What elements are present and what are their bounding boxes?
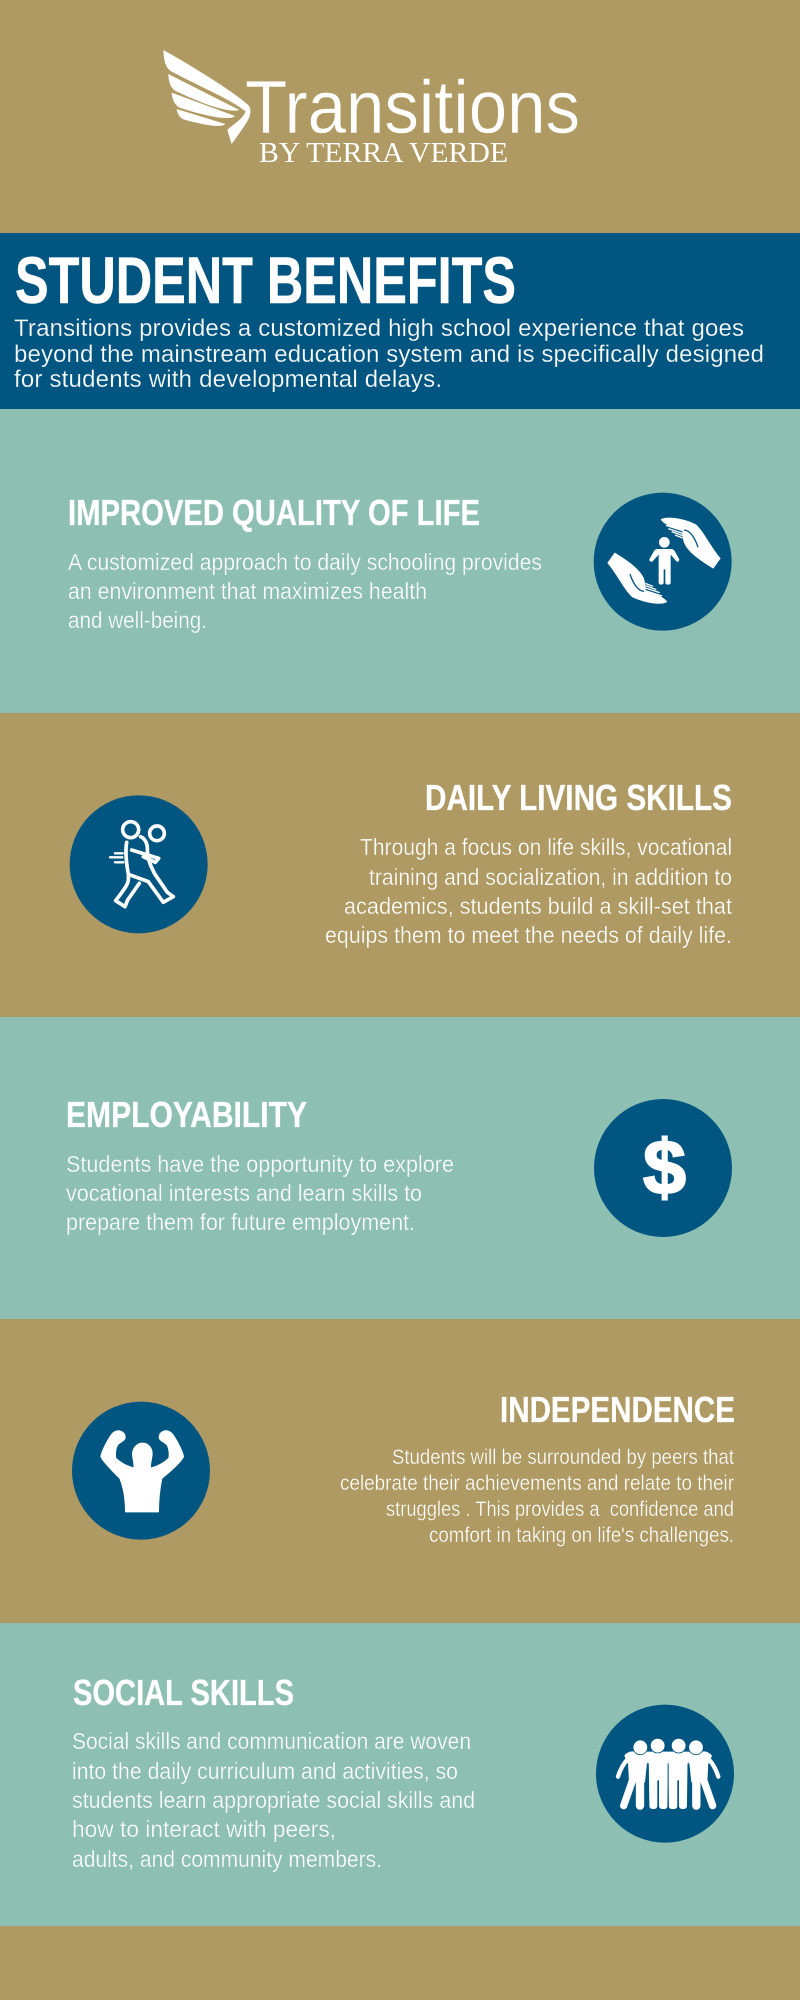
body text: Students will be surrounded by peers that	[392, 1446, 734, 1469]
body text: adults, and community members.	[72, 1846, 382, 1872]
body text: students learn appropriate social skills and	[72, 1787, 475, 1813]
icon: hands holding child	[594, 493, 732, 631]
body text: an environment that maximizes health	[68, 578, 427, 604]
logo: wing icon	[163, 50, 250, 144]
icon: flexing figure	[72, 1402, 210, 1540]
body text: A customized approach to daily schooling provides	[68, 549, 542, 575]
panel: logo header	[0, 0, 800, 233]
intro text	[14, 315, 764, 393]
panel: independence	[0, 1319, 800, 1623]
body text: Social skills and communication are woven	[72, 1728, 471, 1754]
panel: social skills	[0, 1623, 800, 1926]
icon: group of four people	[596, 1705, 734, 1843]
intro text: Transitions provides a customized high school experience that goes	[14, 315, 744, 342]
title: STUDENT BENEFITS	[15, 243, 516, 317]
heading: DAILY LIVING SKILLS	[425, 777, 732, 818]
logo: Transitions wordmark: Transitions	[245, 65, 580, 149]
panel: bottom band	[0, 1926, 800, 2000]
body text: how to interact with peers,	[72, 1816, 336, 1842]
body text: into the daily curriculum and activities, so	[72, 1758, 458, 1784]
panel: student benefits intro	[0, 233, 800, 409]
body text: vocational interests and learn skills to	[66, 1180, 422, 1206]
body text	[340, 1446, 734, 1547]
body text: prepare them for future employment.	[66, 1209, 415, 1235]
body text: academics, students build a skill-set that	[344, 893, 732, 919]
body text	[66, 1151, 454, 1235]
logo: by Terra Verde: BY TERRA VERDE	[259, 138, 508, 169]
body text: and well-being.	[68, 607, 207, 633]
heading: INDEPENDENCE	[500, 1389, 735, 1430]
body text	[68, 549, 542, 633]
panel: improved quality of life	[0, 409, 800, 713]
body text: celebrate their achievements and relate to their	[340, 1472, 734, 1495]
icon: dollar sign: $	[643, 1125, 686, 1211]
body text: Students have the opportunity to explore	[66, 1151, 454, 1177]
body text	[72, 1728, 475, 1872]
body text: training and socialization, in addition to	[369, 864, 732, 890]
heading: SOCIAL SKILLS	[73, 1672, 294, 1713]
panel: daily living skills	[0, 713, 800, 1017]
body text: comfort in taking on life's challenges.	[429, 1524, 734, 1547]
body text: Through a focus on life skills, vocational	[360, 834, 732, 860]
body text: struggles . This provides a confidence and	[386, 1498, 734, 1521]
body text	[325, 834, 732, 948]
heading: IMPROVED QUALITY OF LIFE	[68, 492, 480, 533]
intro text: for students with developmental delays.	[14, 366, 442, 393]
intro text: beyond the mainstream education system and is specifically designed	[14, 341, 764, 368]
icon: walking figure with speed lines	[70, 795, 208, 933]
panel: employability	[0, 1017, 800, 1319]
body text: equips them to meet the needs of daily life.	[325, 922, 732, 948]
icon: dollar sign	[594, 1099, 732, 1237]
heading: EMPLOYABILITY	[66, 1094, 307, 1135]
